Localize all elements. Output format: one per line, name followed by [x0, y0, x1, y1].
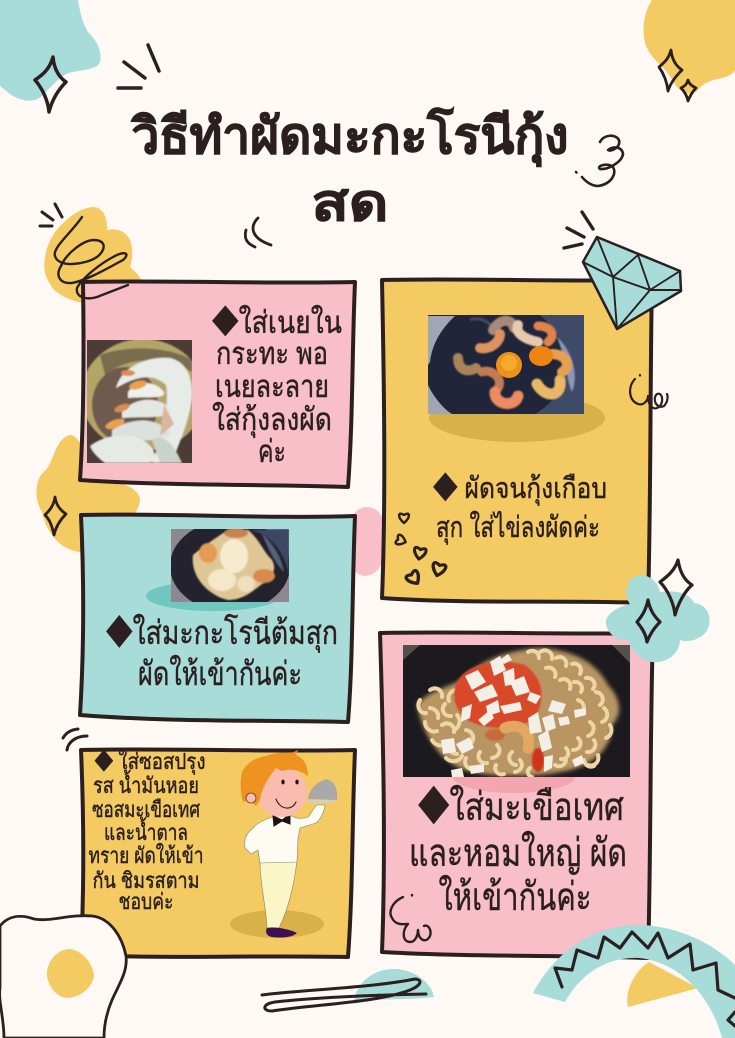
- icon: sparkles top right: [659, 50, 696, 101]
- text: step 3: [106, 614, 338, 692]
- icon: scribble on yellow leaf: [55, 217, 128, 298]
- cloche dome: [308, 779, 337, 800]
- panel: step 3 macaroni: [80, 515, 355, 722]
- zigzag line: [555, 932, 735, 1026]
- text: step 1: เนยละลาย: [215, 369, 329, 404]
- text: step 4: ◆ ใส่ซอสปรุง: [94, 749, 206, 775]
- photo: macaroni with tomato and onion: [403, 645, 630, 777]
- panel: step 5 tomato and onion: [380, 632, 653, 958]
- shadow under step 3 photo: [146, 581, 280, 611]
- cloche tray: [307, 800, 335, 802]
- icon: hearts: [395, 514, 446, 587]
- text: step 4: กัน ชิมรสตาม: [92, 868, 200, 893]
- text: step 3: ผัดให้เข้ากันค่ะ: [138, 655, 302, 692]
- waiter face: [256, 767, 308, 817]
- text: step 1: ใส่กุ้งลงผัด: [212, 402, 332, 439]
- blob: yellow upper left leaf: [44, 207, 142, 303]
- text: step 3: ◆ใส่มะกะโรนีต้มสุก: [106, 614, 338, 653]
- icon: gem: [583, 237, 681, 329]
- icon: curl on step 2 panel: [630, 375, 668, 408]
- photo: macaroni in wok: [171, 529, 289, 602]
- shadow under waiter: [230, 910, 324, 938]
- text: step 1: ◆ใส่เนยใน: [212, 305, 342, 340]
- blob: yellow middle left: [36, 435, 140, 552]
- photo: shrimp and egg yolks in wok: [428, 315, 584, 414]
- panel: step 1 butter and shrimp: [80, 281, 355, 487]
- icon: waiter holding a cloche: [241, 750, 337, 938]
- icon: curl on step 5 panel: [390, 895, 431, 942]
- icon: sparkle on yellow blob: [45, 497, 66, 535]
- text: step 2: ◆ ผัดจนกุ้งเกือบ: [433, 472, 607, 506]
- macaroni elbows: [418, 650, 611, 777]
- shrimp: [505, 726, 529, 748]
- egg yolk: [47, 949, 94, 998]
- text: step 4: ทราย ผัดให้เข้า: [88, 843, 204, 868]
- text: step 2: [433, 472, 607, 545]
- icon: spark lines top left of panel 1: [40, 204, 62, 226]
- waiter trousers: [260, 861, 297, 928]
- icon: squiggle right of title: [576, 136, 623, 186]
- icon: sparkle top left: [35, 57, 66, 112]
- icon: scribble bottom: [262, 979, 426, 1011]
- waiter bow tie: [273, 814, 290, 826]
- icon: spark lines by gem: [564, 212, 593, 248]
- text: step 4: รส น้ำมันหอย: [93, 770, 199, 798]
- icon: curved marks under title: [245, 218, 271, 247]
- photo: shrimp in melted butter: [87, 340, 192, 463]
- icon: sparkles on teal blob: [637, 560, 692, 642]
- text: step 1: [212, 305, 342, 469]
- text: step 5: ◆ใส่มะเขือเทศ: [418, 785, 624, 829]
- text: step 1: กระทะ พอ: [216, 336, 328, 371]
- shadow under step 5 photo: [453, 761, 575, 793]
- text: step 2: สุก ใส่ไข่ลงผัดค่ะ: [436, 510, 600, 545]
- text: step 5: และหอมใหญ่ ผัด: [409, 831, 627, 875]
- onion pieces: [441, 654, 586, 777]
- icon: small arcs above step 4: [63, 729, 87, 750]
- text: step 1: ค่ะ: [258, 434, 286, 469]
- panel: step 4 seasoning with waiter: [81, 749, 355, 957]
- panel: step 2 shrimp and egg: [382, 279, 652, 603]
- arc: teal arch with yellow wedge: [533, 925, 735, 1038]
- waiter eyes and smile: [276, 780, 299, 808]
- text: step 5: [409, 785, 627, 919]
- text: step 4: [88, 749, 206, 914]
- text: step 4: ชอบค่ะ: [118, 889, 174, 914]
- blob: teal top left: [0, 0, 100, 101]
- tomato: [454, 662, 544, 772]
- waiter shoes: [266, 927, 297, 938]
- blob: teal right: [606, 575, 710, 662]
- waiter shirt: [245, 805, 325, 863]
- shadow under step 2 photo: [429, 394, 605, 442]
- blob: teal semicircle bottom: [354, 969, 434, 1000]
- text: step 4: และน้ำตาล: [104, 817, 188, 845]
- text: step 4: ซอสมะเขือเทศ: [92, 797, 200, 822]
- waiter hair: [241, 750, 308, 806]
- blob: fried egg: [0, 916, 126, 1038]
- text: step 5: ให้เข้ากันค่ะ: [438, 875, 592, 919]
- blob: yellow top right: [644, 0, 735, 94]
- title: [131, 106, 568, 231]
- icon: spark lines by title: [118, 45, 159, 88]
- waiter ear: [246, 793, 256, 803]
- title: สด: [312, 175, 388, 231]
- blob: pink middle: [348, 507, 386, 576]
- title: วิธีทำผัดมะกะโรนีกุ้ง: [131, 106, 568, 167]
